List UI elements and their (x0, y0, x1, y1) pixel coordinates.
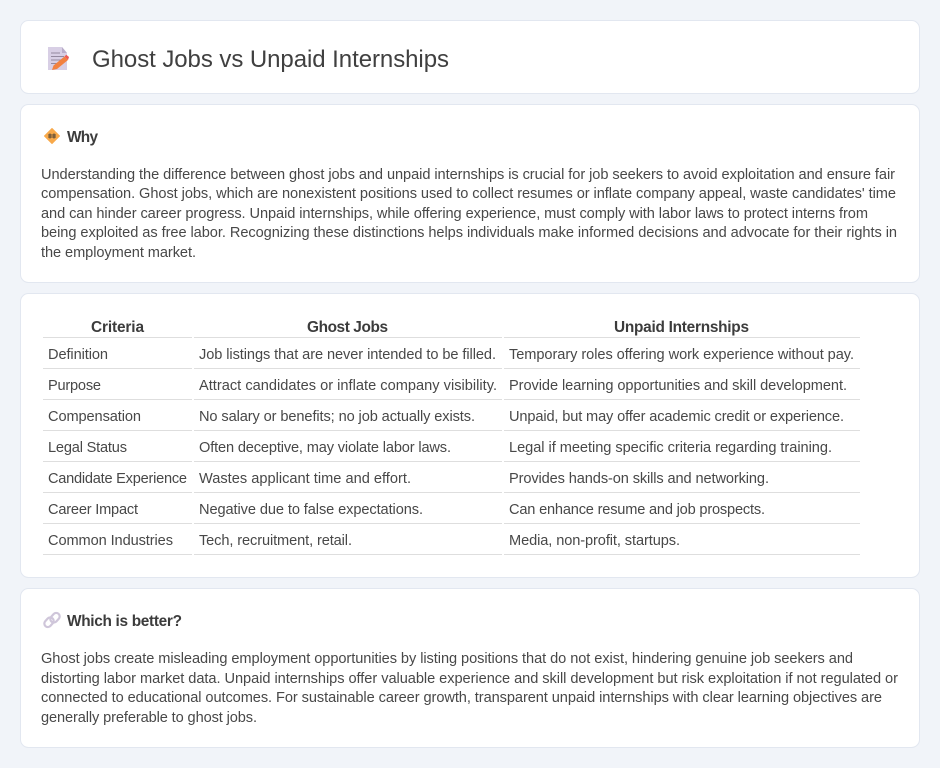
panel: why (20, 104, 920, 282)
row: purpose: Provide learning opportunities and skill development. (509, 378, 847, 394)
row: compensation: No salary or benefits; no job actually exists. (199, 409, 475, 425)
title: Ghost Jobs vs Unpaid Internships (92, 46, 449, 73)
table header: Ghost Jobs (307, 319, 388, 336)
text block: why paragraph: and can hinder career progress. Unpaid internships, while offering experience, must comply with labor laws to protect interns from (41, 206, 868, 222)
text block: which is better paragraph: distorting labor market data. Unpaid internships offer valuable experience and skill development but risk exploitation if not regulated or (41, 671, 898, 687)
row: candidate experience: Candidate Experience (48, 471, 187, 487)
text block: why paragraph (41, 167, 897, 261)
row: candidate experience: Provides hands-on skills and networking. (509, 471, 769, 487)
text block: which is better paragraph (41, 651, 898, 726)
row: purpose: Attract candidates or inflate company visibility. (199, 378, 497, 394)
row: definition (48, 347, 854, 363)
text block: why paragraph: compensation. Ghost jobs, which are nonexistent positions used to collect resumes or inflate company appeal, waste candidates' time (41, 186, 896, 202)
row: common industries: Common Industries (48, 533, 173, 549)
heading: why: Why (67, 129, 98, 146)
text block: why paragraph: being exploited as free labor. Recognizing these distinctions helps individuals make informed decisions and advocate for their rights in (41, 225, 897, 241)
row: legal status: Legal Status (48, 440, 127, 456)
row: common industries: Media, non-profit, startups. (509, 533, 680, 549)
row: compensation (48, 409, 844, 425)
row: compensation: Compensation (48, 409, 141, 425)
row: career impact: Negative due to false expectations. (199, 502, 423, 518)
row: career impact (48, 502, 765, 518)
text block: why paragraph: Understanding the difference between ghost jobs and unpaid internships is crucial for job seekers to avoid exploitation and ensure fair (41, 167, 895, 183)
text block: which is better paragraph: connected to educational outcomes. For sustainable career growth, transparent unpaid internships with clear learning objectives are (41, 690, 882, 706)
row: candidate experience (48, 471, 769, 487)
icon: warning diamond (44, 128, 60, 144)
row: legal status (48, 440, 832, 456)
row: common industries: Tech, recruitment, retail. (199, 533, 352, 549)
icon: link (43, 612, 61, 628)
row: legal status: Often deceptive, may violate labor laws. (199, 440, 451, 456)
text block: why paragraph: the employment market. (41, 245, 196, 261)
row: compensation: Unpaid, but may offer academic credit or experience. (509, 409, 844, 425)
table header: Criteria (91, 319, 144, 336)
icon: memo with pencil (48, 47, 69, 70)
row: purpose (48, 378, 847, 394)
row: definition: Job listings that are never intended to be filled. (199, 347, 496, 363)
row: career impact: Can enhance resume and job prospects. (509, 502, 765, 518)
panel: header (20, 20, 920, 94)
row: career impact: Career Impact (48, 502, 138, 518)
text block: which is better paragraph: Ghost jobs create misleading employment opportunities by listing positions that do not exist, hindering genuine job seekers and (41, 651, 853, 667)
row: purpose: Purpose (48, 378, 101, 394)
row: definition: Definition (48, 347, 108, 363)
row: candidate experience: Wastes applicant time and effort. (199, 471, 411, 487)
heading: which is better: Which is better? (67, 613, 182, 630)
text block: which is better paragraph: generally preferable to ghost jobs. (41, 710, 257, 726)
panel: which is better (20, 588, 920, 748)
row: definition: Temporary roles offering work experience without pay. (509, 347, 854, 363)
table header (91, 319, 749, 336)
table header: Unpaid Internships (614, 319, 749, 336)
row: common industries (48, 533, 680, 549)
panel: comparison table (20, 294, 920, 578)
row: legal status: Legal if meeting specific criteria regarding training. (509, 440, 832, 456)
